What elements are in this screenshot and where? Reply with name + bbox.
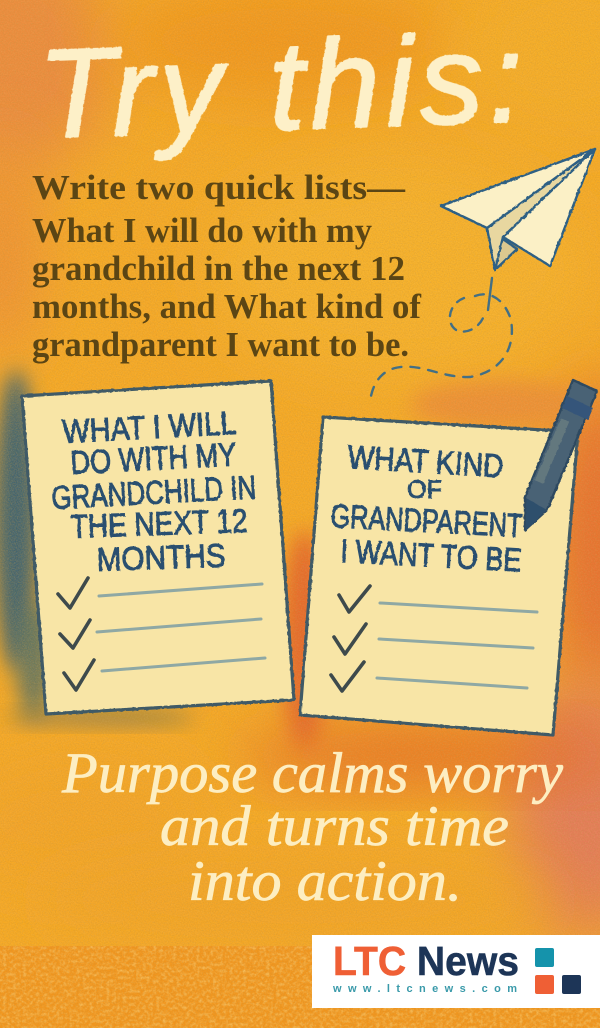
instruction text block: grandchild in the next 12 — [32, 249, 405, 288]
icon: paper airplane — [441, 149, 595, 270]
heading right: GRANDPARENT — [330, 497, 523, 544]
heading left: MONTHS — [96, 537, 226, 578]
closing message: Purpose calms worry — [61, 742, 564, 805]
instruction text block: months, and What kind of — [32, 287, 421, 326]
closing message: and turns time — [160, 795, 509, 858]
heading right: I WANT TO BE — [340, 532, 522, 578]
writing lines right — [377, 603, 537, 688]
logo url: www.ltcnews.com — [332, 983, 517, 995]
paper sheet left — [22, 381, 294, 714]
heading left: GRANDCHILD IN — [50, 468, 257, 516]
title: Try this: — [36, 7, 526, 165]
instruction text block: grandparent I want to be. — [32, 325, 409, 364]
instruction text block: Write two quick lists— — [32, 168, 406, 207]
closing message: into action. — [188, 850, 462, 913]
writing lines left — [97, 584, 265, 671]
icon: crayon — [525, 380, 597, 530]
heading left — [50, 404, 257, 578]
closing message — [61, 752, 564, 902]
heading left: WHAT I WILL — [61, 404, 237, 450]
instruction text block — [32, 168, 421, 364]
heading right: WHAT KIND — [347, 438, 505, 485]
instruction text block: What I will do with my — [32, 211, 372, 250]
logo: LTC News — [312, 935, 600, 1008]
logo wordmark: LTC News — [333, 938, 519, 984]
heading right: OF — [407, 476, 442, 504]
paper sheet right — [300, 417, 578, 735]
checkmarks left — [58, 578, 94, 690]
heading left: DO WITH MY — [69, 435, 237, 481]
dashed flight path — [370, 278, 512, 402]
heading left: THE NEXT 12 — [70, 502, 248, 545]
heading right — [330, 438, 523, 578]
panel: what I will do — [22, 381, 294, 714]
logo squares — [535, 948, 581, 994]
panel: what kind of grandparent — [300, 417, 578, 735]
checkmarks right — [331, 586, 370, 691]
